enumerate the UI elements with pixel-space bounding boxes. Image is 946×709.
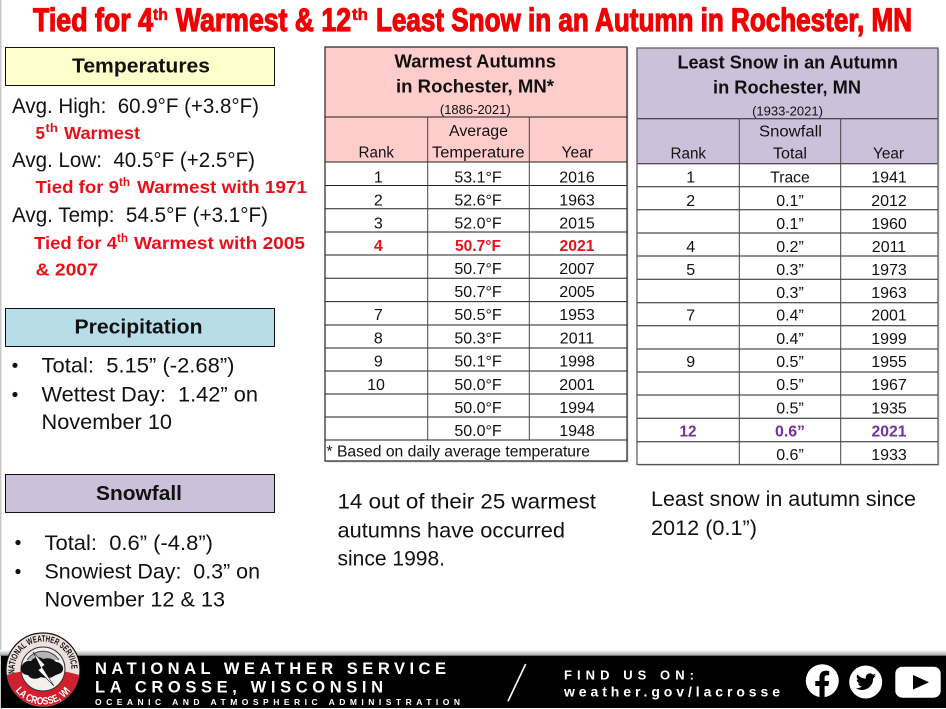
table: least snow (637, 48, 940, 466)
column headers: Total (773, 146, 807, 163)
table rows: 4 (686, 239, 695, 256)
table heading (677, 51, 898, 118)
note: warmest autumns: 14 out of their 25 warmest (338, 490, 596, 513)
table rows: 1963 (871, 285, 907, 302)
column headers: Year (562, 145, 593, 162)
table heading: Least Snow in an Autumn (677, 51, 898, 72)
table rows: 50.0°F (454, 423, 502, 440)
table rows: 0.6” (776, 447, 804, 464)
snowfall list (15, 532, 260, 612)
panel: temperatures (6, 48, 307, 280)
table rows: 0.2” (776, 239, 804, 256)
table rows: 1 (686, 170, 695, 187)
table rows: 0.1” (776, 216, 804, 233)
footer banner (0, 650, 946, 708)
table heading: in Rochester, MN (713, 76, 861, 97)
average high: Warmest (64, 123, 140, 143)
table rows: 8 (374, 331, 383, 348)
office name (95, 660, 460, 707)
title: th (352, 5, 368, 24)
note: warmest autumns: autumns have occurred (338, 519, 565, 542)
seal text (8, 635, 78, 704)
table rows: 1994 (559, 400, 595, 417)
average high: th (46, 123, 58, 135)
note: least snow: 2012 (0.1”) (651, 517, 757, 540)
table heading (395, 51, 556, 117)
table rows: 1935 (871, 401, 907, 418)
table rows: 1 (374, 170, 383, 187)
note: least snow: Least snow in autumn since (651, 488, 916, 511)
average high: Avg. High: 60.9°F (+3.8°F) (12, 95, 259, 118)
note: warmest autumns (338, 490, 596, 570)
column headers (670, 124, 904, 163)
table rows: 2 (374, 192, 383, 210)
column headers (358, 123, 593, 162)
precipitation list (12, 355, 258, 434)
note: least snow (651, 488, 916, 540)
precipitation list: Wettest Day: 1.42” on (42, 384, 258, 407)
table rows: 2011 (872, 239, 906, 256)
table rows: 2016 (559, 170, 595, 187)
find us on: FIND US ON: (564, 667, 694, 682)
table rows: 2012 (871, 193, 907, 210)
heading: temperatures: Temperatures (72, 55, 210, 78)
table footnote: * Based on daily average temperature (326, 444, 590, 461)
table heading: in Rochester, MN* (396, 76, 555, 97)
table rows: 50.7°F (455, 238, 501, 255)
table rows: 0.5” (776, 354, 804, 371)
table heading: (1886-2021) (440, 102, 511, 117)
column headers: Average (449, 123, 508, 140)
average low: Tied for 9 (36, 177, 119, 197)
snowfall list: Total: 0.6” (-4.8”) (44, 532, 213, 555)
table rows: 2001 (559, 377, 595, 394)
snowfall list: November 12 & 13 (44, 589, 225, 612)
table rows: 2007 (559, 261, 595, 278)
heading: snowfall (6, 474, 274, 512)
table rows: 2021 (560, 238, 595, 255)
table rows: 7 (686, 308, 695, 325)
average low (12, 149, 307, 197)
table rows: Trace (770, 170, 810, 187)
precipitation list: November 10 (42, 411, 172, 434)
average low: Avg. Low: 40.5°F (+2.5°F) (12, 149, 255, 172)
office name: OCEANIC AND ATMOSPHERIC ADMINISTRATION (95, 697, 460, 707)
table rows: 2015 (559, 216, 595, 232)
table: warmest autumns (325, 47, 628, 462)
average high: 5 (36, 123, 45, 143)
column headers: Snowfall (759, 124, 822, 141)
panel: precipitation (6, 308, 274, 434)
average low: th (119, 177, 130, 189)
average high (12, 95, 259, 143)
table rows: 5 (686, 262, 695, 279)
table rows: 0.5” (776, 377, 804, 394)
title: Tied for 4 (33, 2, 153, 38)
office name: NATIONAL WEATHER SERVICE (95, 660, 446, 678)
table rows: 1933 (871, 447, 907, 464)
table rows: 1955 (871, 354, 907, 371)
table rows: 2 (686, 193, 695, 210)
table rows: 12 (680, 424, 697, 441)
table rows (680, 170, 907, 464)
table rows: 2001 (871, 308, 907, 325)
table rows: 7 (374, 307, 383, 324)
precipitation list: Total: 5.15” (-2.68”) (42, 355, 234, 378)
table rows: 1960 (871, 216, 907, 233)
icon: twitter (849, 666, 882, 698)
table rows: 1953 (559, 307, 595, 324)
table rows: 1973 (871, 262, 907, 279)
table rows: 2005 (559, 284, 595, 301)
heading: temperatures (6, 48, 274, 86)
table rows: 0.3” (776, 262, 804, 279)
table heading: (1933-2021) (752, 103, 823, 118)
find us on: weather.gov/lacrosse (563, 684, 780, 700)
heading: precipitation: Precipitation (74, 316, 202, 338)
average temperature: Warmest with 2005 (134, 233, 305, 253)
table rows: 10 (367, 377, 385, 394)
average temperature: Tied for 4 (34, 233, 117, 253)
table rows: 2021 (872, 424, 907, 441)
heading: snowfall: Snowfall (96, 482, 182, 505)
table rows: 1998 (559, 354, 595, 371)
average temperature (12, 204, 305, 280)
column headers: Year (873, 146, 904, 163)
logo: NWS La Crosse seal (6, 632, 80, 708)
table rows: 9 (374, 354, 383, 371)
table rows: 50.3°F (454, 331, 502, 348)
table rows (367, 170, 595, 440)
icon: facebook (806, 664, 839, 698)
average temperature: Avg. Temp: 54.5°F (+3.1°F) (12, 204, 268, 227)
column headers: Rank (670, 146, 706, 163)
table rows: 52.6°F (454, 192, 502, 210)
average low: Warmest with 1971 (137, 177, 307, 197)
seal text: NATIONAL WEATHER SERVICE (8, 635, 78, 674)
title: th (153, 5, 168, 24)
table rows: 0.4” (776, 308, 804, 325)
snowfall list: Snowiest Day: 0.3” on (44, 561, 260, 584)
table heading: Warmest Autumns (395, 51, 556, 72)
table rows: 1948 (559, 423, 595, 440)
column headers: Rank (358, 145, 394, 162)
table rows: 50.0°F (454, 400, 502, 417)
table rows: 50.0°F (454, 377, 502, 394)
average temperature: & 2007 (36, 260, 98, 280)
table rows: 0.1” (776, 193, 804, 210)
table rows: 2011 (560, 331, 594, 348)
table rows: 53.1°F (454, 170, 502, 187)
table rows: 1967 (871, 377, 907, 394)
find us on (563, 667, 780, 700)
table rows: 50.7°F (454, 284, 502, 301)
table rows: 1941 (871, 170, 907, 187)
table rows: 0.3” (776, 285, 804, 302)
column headers: Temperature (432, 145, 524, 162)
table rows: 0.5” (776, 401, 804, 418)
slash divider (508, 664, 526, 701)
heading: precipitation (6, 308, 274, 346)
panel: snowfall (6, 474, 274, 612)
table rows: 1999 (871, 331, 907, 348)
table rows: 9 (686, 354, 695, 371)
table rows: 0.6” (775, 424, 805, 441)
title: Warmest & 12 (176, 2, 351, 38)
table rows: 52.0°F (454, 216, 502, 232)
title (33, 2, 912, 38)
table rows: 50.1°F (454, 354, 502, 371)
table rows: 3 (374, 216, 383, 232)
note: warmest autumns: since 1998. (338, 547, 445, 570)
table rows: 0.4” (776, 331, 804, 348)
table rows: 50.7°F (454, 261, 502, 278)
table rows: 4 (374, 238, 383, 255)
icon: youtube (895, 667, 941, 698)
office name: LA CROSSE, WISCONSIN (95, 679, 383, 697)
table rows: 1963 (559, 192, 595, 210)
table rows: 50.5°F (454, 307, 502, 324)
seal text: LA CROSSE, WI (16, 686, 70, 704)
average temperature: th (117, 233, 128, 245)
